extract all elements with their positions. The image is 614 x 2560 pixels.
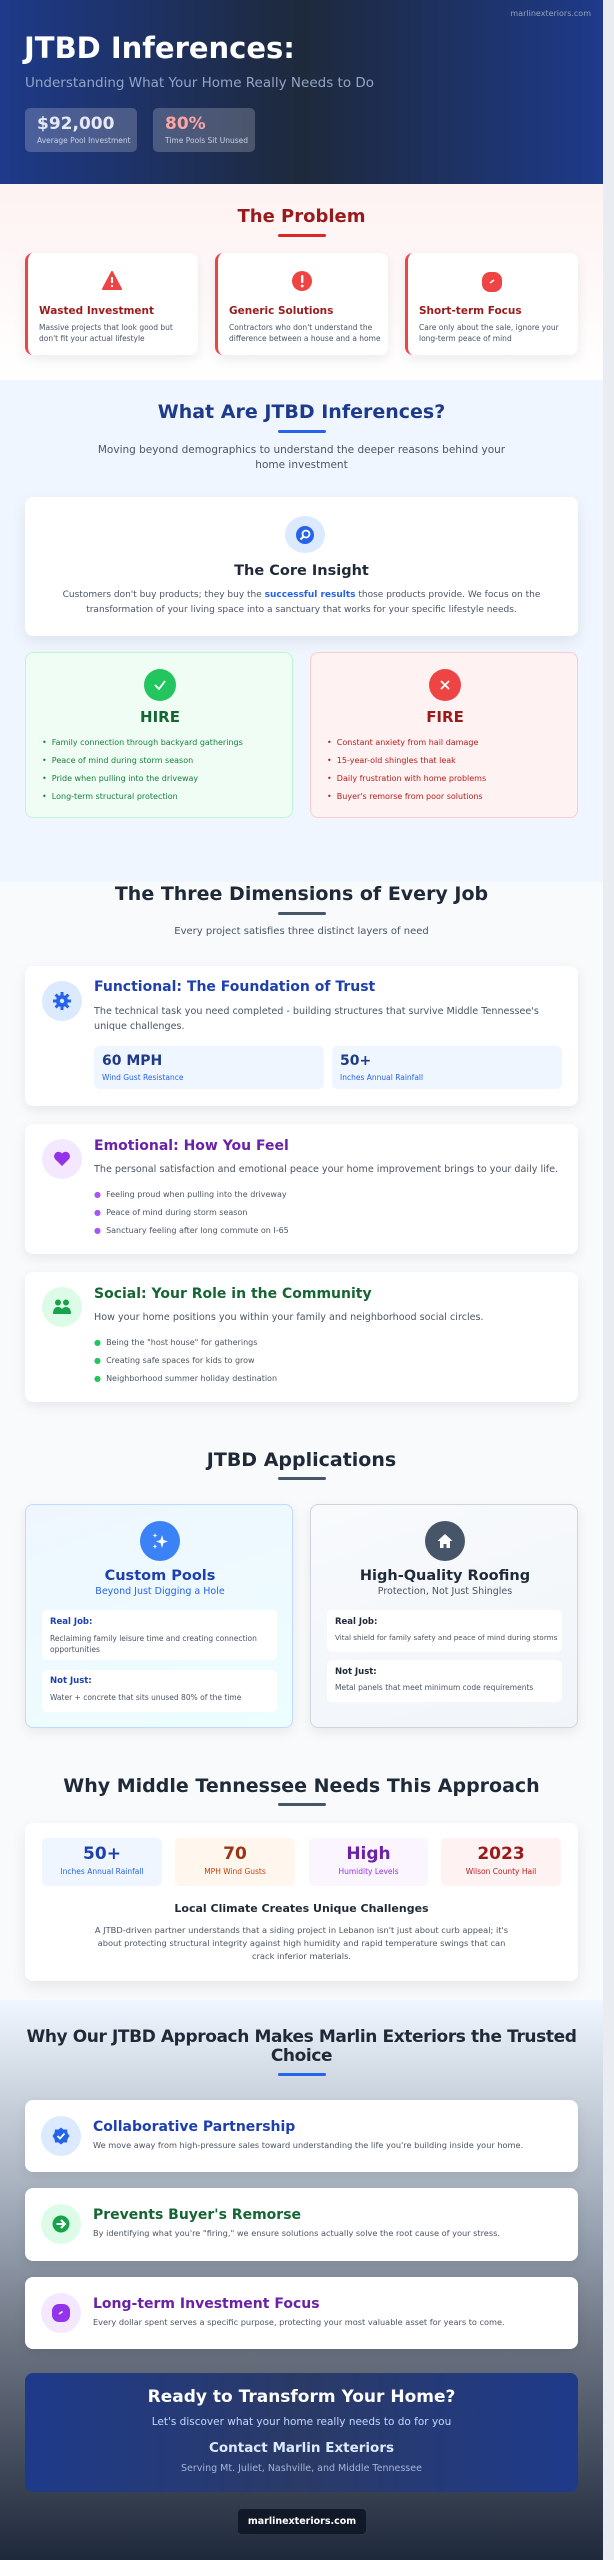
card: generic solutions [215, 253, 388, 355]
box: real job: Real Job: [335, 1617, 377, 1627]
icon: search [285, 516, 325, 553]
card: social: Social: Your Role in the Community [94, 1286, 372, 1302]
heading [26, 2027, 576, 2066]
card: emotional: The personal satisfaction and emotional peace your home improvement brings to your daily life. [94, 1164, 558, 1175]
stat: wind: 60 MPH [102, 1053, 162, 1069]
card: emotional: ● Feeling proud when pulling into the driveway [94, 1190, 287, 1199]
stat: humidity [309, 1838, 428, 1886]
card: core insight: Customers don't buy products; they buy the successful results those products provide. We focus on the transformation of your living space into a sanctuary that works for your specific lifestyle needs. [63, 590, 540, 615]
section: what are JTBD inferences [0, 380, 603, 882]
card: long-term: Every dollar spent serves a specific purpose, protecting your most valuable asset for years to come. [93, 2317, 505, 2327]
card: generic solutions: Contractors who don't understand the difference between a house and a home [229, 323, 381, 343]
panel: fire: • Constant anxiety from hail damage [327, 738, 478, 747]
heading: The Problem [237, 206, 366, 227]
stat: rainfall: 50+ [83, 1844, 121, 1864]
heading: Choice [271, 2046, 332, 2066]
stat: pool investment: Average Pool Investment [37, 136, 131, 145]
panel: fire: FIRE [426, 708, 464, 726]
card: partnership [25, 2100, 578, 2172]
heading: applications: JTBD Applications [207, 1449, 396, 1471]
card: wasted investment: Massive projects that look good but don't fit your actual lifestyle [39, 323, 173, 343]
card: climate stats [25, 1823, 578, 1981]
stat: wind: 70 [223, 1844, 247, 1864]
cta panel: Let's discover what your home really needs to do for you [152, 2416, 451, 2428]
card: short-term focus: Short-term Focus [419, 305, 522, 317]
card: remorse: By identifying what you're "firing," we ensure solutions actually solve the root cause of your stress. [93, 2228, 500, 2238]
footer url pill [238, 2509, 366, 2534]
card: generic solutions: Generic Solutions [229, 305, 333, 317]
card: functional [25, 966, 578, 1106]
icon: exclamation [292, 271, 312, 291]
panel: hire: • Pride when pulling into the driveway [42, 774, 198, 783]
panel: custom pools: Beyond Just Digging a Hole [95, 1586, 225, 1597]
card: social: ● Being the "host house" for gatherings [94, 1338, 257, 1347]
footer url pill: marlinexteriors.com [248, 2516, 356, 2527]
stat: rainfall: Inches Annual Rainfall [60, 1867, 144, 1876]
stat: wind [94, 1046, 324, 1089]
stat: rainfall [332, 1046, 562, 1089]
section: the problem [0, 184, 603, 380]
cta panel: Serving Mt. Juliet, Nashville, and Middle Tennessee [181, 2463, 422, 2474]
card: climate stats: A JTBD-driven partner understands that a siding project in Lebanon isn't just about curb appeal; it's about protecting structural integrity against high humidity and rapid temperature swings that can crack inferior materials. [95, 1925, 508, 1961]
card: climate stats: Local Climate Creates Unique Challenges [174, 1902, 429, 1915]
box: not just: Metal panels that meet minimum code requirements [335, 1683, 533, 1692]
heading: three dimensions: The Three Dimensions of Every Job [115, 883, 488, 905]
heading: middle tennessee: Why Middle Tennessee Needs This Approach [63, 1775, 540, 1797]
panel: hire: • Family connection through backyard gatherings [42, 738, 243, 747]
panel: custom pools [25, 1504, 293, 1728]
box: not just [327, 1660, 562, 1702]
cta panel: Ready to Transform Your Home? [148, 2387, 455, 2407]
stat: humidity: Humidity Levels [338, 1867, 399, 1876]
stat: wind [175, 1838, 295, 1886]
stat: hail: 2023 [477, 1844, 525, 1864]
panel: hire [25, 652, 293, 818]
panel: custom pools: Custom Pools [105, 1568, 215, 1584]
box: real job [327, 1610, 562, 1652]
box: not just [42, 1670, 277, 1712]
card: social: ● Creating safe spaces for kids to grow [94, 1356, 255, 1365]
box: real job [42, 1610, 277, 1660]
title: JTBD Inferences: [24, 31, 295, 65]
card: functional: Functional: The Foundation of Trust [94, 979, 375, 995]
stat: rainfall: Inches Annual Rainfall [340, 1073, 423, 1082]
icon: sparkle [140, 1521, 180, 1561]
box: not just: Water + concrete that sits unused 80% of the time [50, 1693, 241, 1702]
card: functional: The technical task you need completed - building structures that survive Middle Tennessee's unique challenges. [94, 1006, 539, 1032]
cta panel: Contact Marlin Exteriors [209, 2440, 394, 2456]
section: why marlin [0, 2000, 603, 2560]
box: real job: Reclaiming family leisure time and creating connection opportunities [50, 1634, 257, 1654]
stat: unused: Time Pools Sit Unused [165, 136, 248, 145]
card: emotional: Emotional: How You Feel [94, 1138, 289, 1154]
panel: roofing [310, 1504, 578, 1728]
panel: fire: • 15-year-old shingles that leak [327, 756, 456, 765]
stat: pool investment: $92,000 [37, 114, 114, 134]
card: short-term focus: Care only about the sale, ignore your long-term peace of mind [419, 323, 559, 343]
box: real job: Vital shield for family safety and peace of mind during storms [335, 1633, 557, 1642]
stat: humidity: High [346, 1844, 391, 1864]
card: remorse: Prevents Buyer's Remorse [93, 2207, 301, 2223]
card: partnership: We move away from high-pressure sales toward understanding the life you're building inside your home. [93, 2140, 523, 2150]
stat: hail: Wilson County Hail [466, 1867, 536, 1876]
stat: pool investment [25, 108, 137, 152]
icon: arrow [41, 2204, 81, 2244]
panel: hire: HIRE [140, 708, 180, 726]
panel: hire: • Peace of mind during storm season [42, 756, 193, 765]
site url: marlinexteriors.com [510, 9, 591, 18]
card: social: How your home positions you within your family and neighborhood social circles. [94, 1312, 484, 1323]
card: long-term: Long-term Investment Focus [93, 2296, 320, 2312]
icon: x [429, 669, 461, 701]
icon: gear [42, 981, 82, 1021]
icon: check [144, 669, 176, 701]
card: core insight [25, 497, 578, 636]
card: partnership: Collaborative Partnership [93, 2119, 295, 2135]
box: real job: Real Job: [50, 1617, 92, 1627]
icon: clock [482, 272, 502, 292]
card: long-term [25, 2277, 578, 2349]
stat: unused: 80% [165, 114, 206, 134]
box: not just: Not Just: [50, 1676, 92, 1686]
subtitle: three dimensions: Every project satisfies three distinct layers of need [174, 926, 429, 937]
stat: wind: Wind Gust Resistance [102, 1073, 183, 1082]
icon: heart [42, 1139, 82, 1179]
icon: badge check [41, 2116, 81, 2156]
card: core insight: The Core Insight [234, 563, 369, 579]
stat: unused [153, 108, 255, 152]
panel: fire: • Buyer's remorse from poor solutions [327, 792, 483, 801]
heading: Why Our JTBD Approach Makes Marlin Exteriors the Trusted [26, 2027, 576, 2047]
icon: house [425, 1521, 465, 1561]
header [0, 0, 603, 184]
stat: wind: MPH Wind Gusts [204, 1867, 266, 1876]
stat: rainfall [42, 1838, 162, 1886]
panel: roofing: High-Quality Roofing [360, 1568, 530, 1584]
panel: roofing: Protection, Not Just Shingles [378, 1586, 512, 1597]
panel: fire [310, 652, 578, 818]
card: social: ● Neighborhood summer holiday destination [94, 1374, 277, 1383]
card: wasted investment [25, 253, 198, 355]
panel: hire: • Long-term structural protection [42, 792, 178, 801]
stat: rainfall: 50+ [340, 1053, 371, 1069]
icon: warning [102, 271, 122, 290]
icon: people [42, 1287, 82, 1327]
icon: clock [41, 2293, 81, 2333]
box: not just: Not Just: [335, 1667, 377, 1677]
heading: What Are JTBD Inferences? [158, 401, 445, 423]
card: social [25, 1272, 578, 1402]
card: short-term focus [405, 253, 578, 355]
cta panel [25, 2373, 578, 2492]
card: wasted investment: Wasted Investment [39, 305, 154, 317]
card: remorse [25, 2188, 578, 2261]
stat: hail [441, 1838, 561, 1886]
card: emotional: ● Sanctuary feeling after long commute on I-65 [94, 1226, 289, 1235]
subtitle: Moving beyond demographics to understand the deeper reasons behind your home investment [98, 444, 505, 470]
card: emotional: ● Peace of mind during storm season [94, 1208, 247, 1217]
subtitle: Understanding What Your Home Really Needs to Do [25, 75, 374, 91]
card: emotional [25, 1124, 578, 1254]
panel: fire: • Daily frustration with home problems [327, 774, 486, 783]
